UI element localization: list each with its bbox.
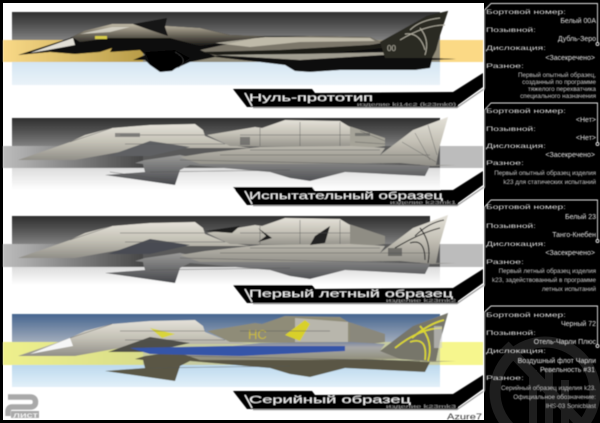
- banner: serial sample: [233, 375, 484, 410]
- panel: first flight sample: [3, 216, 483, 285]
- banner: serial sample: изделие k23mk3: [386, 404, 457, 409]
- info card: test sample: <Нет>: [576, 135, 596, 142]
- info card: null prototype: <Засекречено>: [545, 55, 595, 62]
- info card: test sample: Дислокация:: [486, 144, 547, 150]
- panel: serial sample: [3, 314, 483, 387]
- info card: test sample: <Засекречено>: [545, 152, 595, 159]
- info card: null prototype: Первый опытный образец,: [518, 71, 596, 79]
- banner: serial sample: Серийный образец: [249, 394, 411, 406]
- panel: test sample: [3, 118, 483, 190]
- info card: first flight sample: Белый 23: [565, 213, 596, 221]
- info card: null prototype: Разное:: [486, 64, 525, 70]
- info card: test sample: Бортовой номер:: [486, 108, 567, 115]
- info card: first flight sample: Бортовой номер:: [486, 204, 567, 211]
- info card: test sample: <Нет>: [576, 117, 596, 124]
- info card: null prototype: Дубль-Зеро: [558, 35, 596, 43]
- banner: test sample: изделие k23mk1: [390, 200, 457, 205]
- banner: null prototype: изделие ki14c2 (k23mk0): [357, 102, 457, 107]
- info card: serial sample: IHS-03 Sonicblast: [546, 403, 596, 410]
- info card: test sample: Разное:: [486, 161, 525, 167]
- banner: null prototype: Нуль-прототип: [249, 92, 373, 104]
- info card: test sample: Позывной:: [486, 126, 537, 133]
- signature: Azure7: [447, 412, 483, 422]
- info card: null prototype: Белый 00А: [560, 17, 596, 25]
- info card: null prototype: [483, 4, 599, 100]
- info card: first flight sample: Позывной:: [486, 223, 537, 230]
- aircraft: first flight sample: [18, 215, 456, 283]
- info card: serial sample: [483, 306, 599, 410]
- banner: first flight sample: Первый летный образец: [249, 288, 453, 300]
- info card: test sample: [483, 103, 599, 190]
- banner: first flight sample: [233, 269, 484, 304]
- aircraft: null prototype: [18, 11, 456, 72]
- info card: serial sample: Бортовой номер:: [486, 312, 567, 319]
- info card: test sample: Первый опытный образец изделия: [494, 169, 596, 177]
- info card: first flight sample: Дислокация:: [486, 242, 547, 248]
- watermark emblem: [495, 342, 595, 423]
- info card: null prototype: Бортовой номер:: [486, 9, 567, 16]
- info card: first flight sample: Танго-Кнебен: [552, 231, 596, 239]
- info card: first flight sample: Разное:: [486, 260, 525, 266]
- info card: null prototype: специального назначения: [520, 93, 596, 100]
- aircraft: test sample: [18, 117, 456, 185]
- info card: first flight sample: летных испытаний: [542, 285, 596, 293]
- info card: serial sample: Разное:: [486, 376, 525, 382]
- info card: serial sample: Позывной:: [486, 330, 537, 337]
- info card: first flight sample: Первый летный образец изделия: [499, 267, 596, 275]
- info card: serial sample: Черный 72: [561, 320, 596, 328]
- banner: null prototype: [233, 73, 484, 108]
- aircraft: serial sample: HC: [248, 327, 267, 342]
- info card: serial sample: Дислокация:: [486, 349, 547, 355]
- info card: first flight sample: k23, задействованный в программе: [492, 276, 596, 284]
- banner: first flight sample: изделие k23mk2: [386, 298, 457, 303]
- info card: null prototype: Позывной:: [486, 27, 537, 34]
- aircraft: null prototype: 00: [387, 44, 396, 53]
- banner: test sample: Испытательный образец: [249, 190, 443, 202]
- info card: null prototype: тяжелого перехватчика: [528, 86, 596, 93]
- panel: info background: [484, 0, 600, 423]
- info card: serial sample: Отель-Чарли Плюс: [534, 339, 596, 346]
- info card: serial sample: Воздушный флот Чарли: [518, 357, 596, 365]
- info card: first flight sample: <Засекречено>: [545, 250, 595, 257]
- banner: test sample: [233, 171, 484, 206]
- panel: null prototype: [3, 12, 483, 85]
- info card: null prototype: Дислокация:: [486, 46, 547, 52]
- info card: serial sample: Официальное обозначение:: [513, 393, 596, 401]
- info card: serial sample: Серийный образец изделия k23.: [501, 384, 596, 392]
- aircraft: serial sample: [18, 313, 456, 381]
- info card: null prototype: созданный по программе: [522, 78, 596, 86]
- info card: test sample: k23 для статических испытаний: [503, 178, 596, 186]
- logo: sheet 2: лист: [13, 412, 39, 420]
- info card: first flight sample: [483, 200, 599, 293]
- logo: sheet 2: [8, 397, 39, 420]
- info card: serial sample: Ревельность #31: [540, 367, 595, 374]
